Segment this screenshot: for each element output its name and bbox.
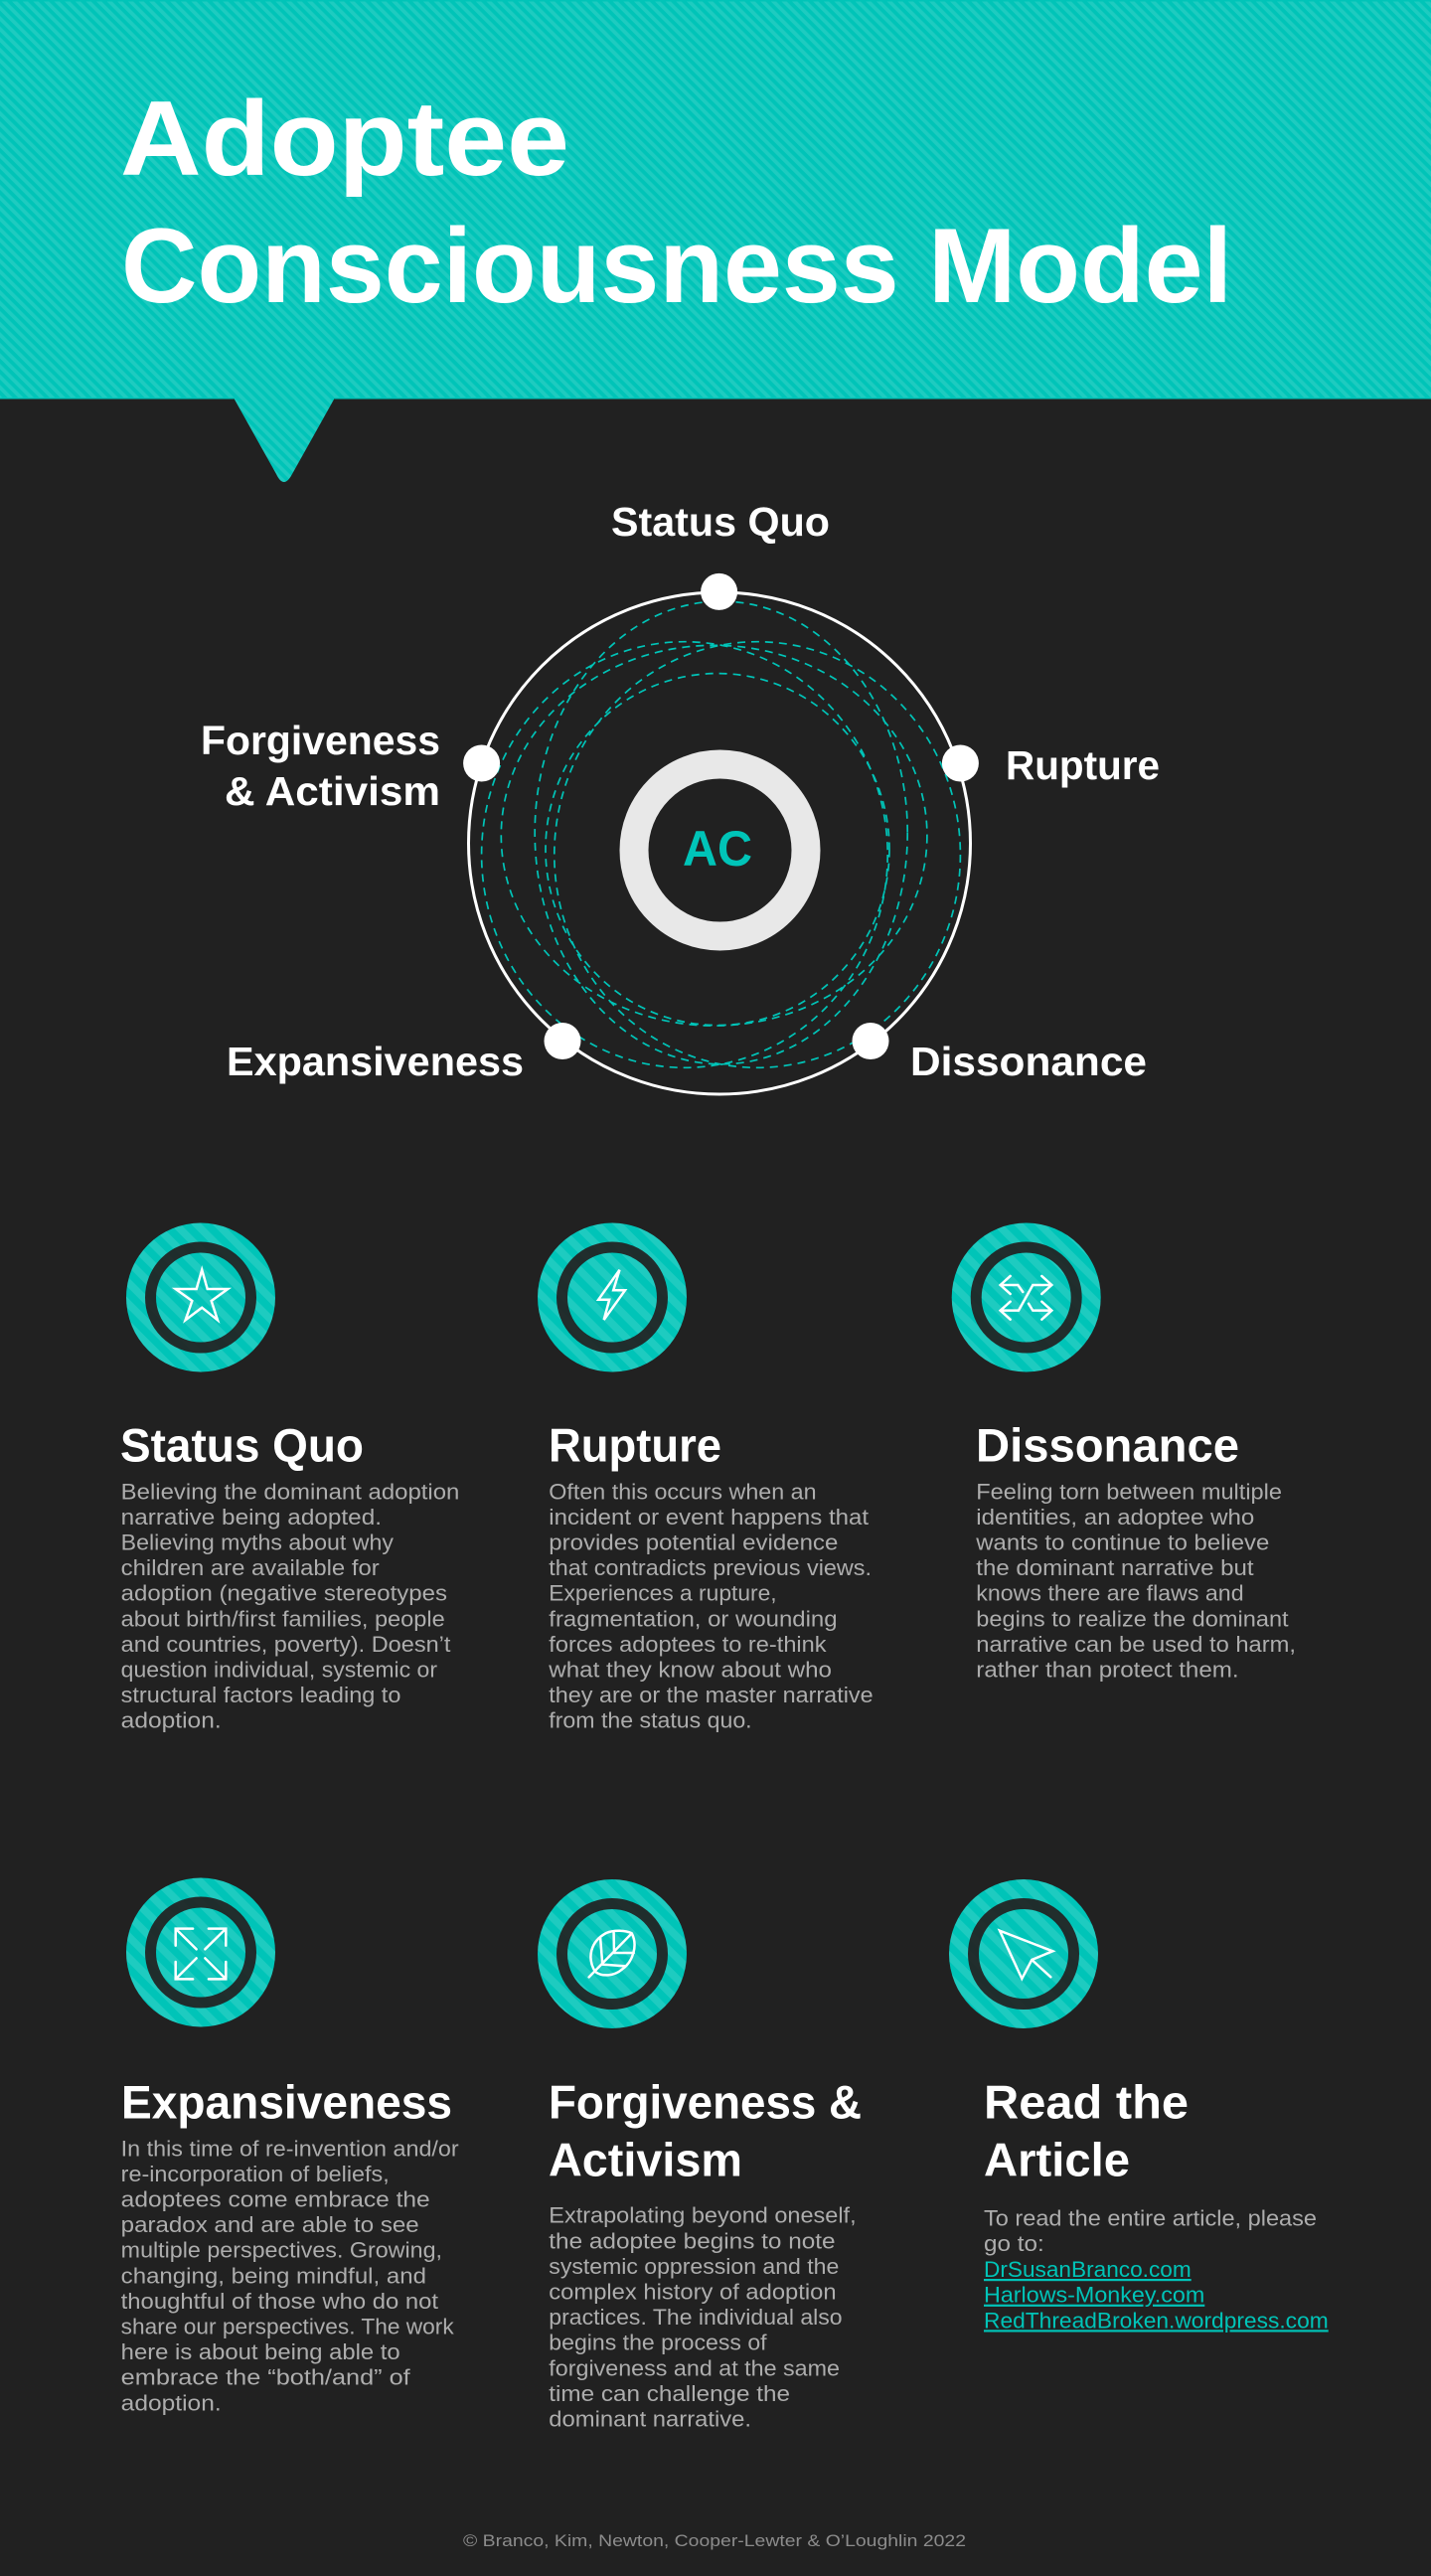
body text: the dominant narrative but (976, 1555, 1254, 1580)
icon: shuffle arrows (952, 1222, 1101, 1371)
panel: read the article (984, 2076, 1329, 2333)
body text: knows there are flaws and (976, 1581, 1244, 1606)
body text: paradox and are able to see (121, 2212, 419, 2237)
body text (549, 2203, 857, 2431)
panel: dissonance (975, 1419, 1296, 1682)
body text: Believing the dominant adoption (121, 1479, 459, 1504)
body text (975, 1479, 1296, 1682)
body text: fragmentation, or wounding (549, 1606, 838, 1631)
body text: Extrapolating beyond oneself, (549, 2203, 857, 2228)
body text (548, 1479, 874, 1733)
links: DrSusanBranco.com (984, 2257, 1192, 2282)
panel: rupture (548, 1419, 874, 1733)
body text: they are or the master narrative (549, 1683, 874, 1707)
cycle diagram (201, 499, 1160, 1094)
body text: share our perspectives. The work (121, 2314, 455, 2339)
heading: Article (984, 2133, 1130, 2185)
title (120, 79, 1232, 325)
label: dissonance: Dissonance (910, 1039, 1147, 1084)
body text: In this time of re-invention and/or (121, 2136, 459, 2161)
body text: incident or event happens that (549, 1505, 869, 1530)
icon: cursor (949, 1879, 1098, 2028)
panel: status quo (120, 1419, 459, 1733)
body text: Experiences a rupture, (549, 1581, 777, 1606)
node: forgiveness (463, 745, 500, 781)
label: forgiveness and activism (201, 718, 440, 814)
footer credit: © Branco, Kim, Newton, Cooper-Lewter & O’Loughlin 2022 (463, 2531, 966, 2550)
body text: embrace the “both/and” of (121, 2365, 411, 2390)
body text: rather than protect them. (976, 1658, 1239, 1682)
body text: structural factors leading to (121, 1683, 400, 1707)
body text: that contradicts previous views. (549, 1555, 872, 1580)
icon: star (126, 1222, 275, 1371)
body text: multiple perspectives. Growing, (121, 2238, 442, 2263)
body text: from the status quo. (549, 1708, 752, 1733)
outer circle (469, 592, 970, 1094)
node: status quo (701, 573, 737, 610)
body text: wants to continue to believe (975, 1530, 1269, 1554)
body text: begins the process of (549, 2331, 768, 2355)
body text: provides potential evidence (549, 1530, 838, 1554)
panel: expansiveness (121, 2076, 459, 2415)
heading: Activism (549, 2133, 742, 2185)
heading: Rupture (549, 1419, 721, 1472)
heading (549, 2076, 862, 2185)
body text: thoughtful of those who do not (121, 2289, 438, 2314)
body text: begins to realize the dominant (976, 1606, 1289, 1631)
node: expansiveness (545, 1023, 580, 1059)
title: Consciousness Model (121, 206, 1232, 325)
body text: adoptees come embrace the (121, 2186, 430, 2212)
panel: forgiveness and activism (549, 2076, 862, 2431)
body text: systemic oppression and the (549, 2254, 839, 2279)
links: Harlows-Monkey.com (984, 2283, 1204, 2308)
body text: Feeling torn between multiple (976, 1479, 1282, 1504)
node: rupture (942, 745, 979, 781)
label: expansiveness: Expansiveness (227, 1039, 524, 1084)
body text: To read the entire article, please (984, 2205, 1317, 2230)
body text: and countries, poverty). Doesn’t (121, 1632, 450, 1657)
heading: Dissonance (976, 1419, 1239, 1472)
body text: Believing myths about why (121, 1530, 394, 1554)
body text: dominant narrative. (549, 2407, 751, 2431)
icon: expand arrows (126, 1878, 275, 2027)
body text (984, 2205, 1317, 2256)
links (984, 2257, 1329, 2333)
heading: Forgiveness & (549, 2076, 862, 2129)
title: Adoptee (120, 79, 569, 198)
center ring with AC (634, 764, 806, 936)
body text: adoption (negative stereotypes (121, 1581, 447, 1606)
label: forgiveness and activism: Forgiveness (201, 718, 440, 763)
heading: Read the (984, 2076, 1189, 2129)
body text: here is about being able to (121, 2339, 400, 2364)
body text (121, 1479, 459, 1733)
body text: forgiveness and at the same (549, 2355, 840, 2380)
body text: what they know about who (548, 1658, 832, 1682)
body text: identities, an adoptee who (976, 1505, 1254, 1530)
body text: changing, being mindful, and (121, 2263, 426, 2288)
heading: Expansiveness (121, 2076, 452, 2129)
label: forgiveness and activism: & Activism (225, 768, 440, 814)
label: rupture: Rupture (1006, 742, 1160, 788)
body text: about birth/first families, people (121, 1606, 445, 1631)
body text (121, 2136, 459, 2415)
body text: children are available for (121, 1555, 380, 1580)
body text: Often this occurs when an (549, 1479, 817, 1504)
label: status quo: Status Quo (611, 499, 830, 545)
icon: lightning bolt (538, 1222, 687, 1371)
heading: Status Quo (120, 1419, 364, 1472)
body text: time can challenge the (549, 2381, 790, 2406)
body text: the adoptee begins to note (549, 2228, 836, 2253)
body text: go to: (984, 2231, 1044, 2256)
body text: complex history of adoption (549, 2280, 837, 2304)
center ring with AC: AC (683, 821, 752, 877)
header banner (0, 0, 1431, 482)
links: RedThreadBroken.wordpress.com (984, 2308, 1329, 2333)
body text: narrative being adopted. (121, 1505, 382, 1530)
body text: narrative can be used to harm, (976, 1632, 1296, 1657)
body text: re-incorporation of beliefs, (121, 2162, 390, 2186)
body text: adoption. (121, 2390, 222, 2415)
body text: forces adoptees to re-think (549, 1632, 828, 1657)
node: dissonance (853, 1023, 888, 1059)
body text: adoption. (121, 1708, 222, 1733)
dashed orbit lines (482, 601, 960, 1067)
body text: practices. The individual also (549, 2305, 843, 2330)
heading (984, 2076, 1189, 2185)
icon: leaf (538, 1879, 687, 2028)
body text: question individual, systemic or (121, 1658, 437, 1682)
